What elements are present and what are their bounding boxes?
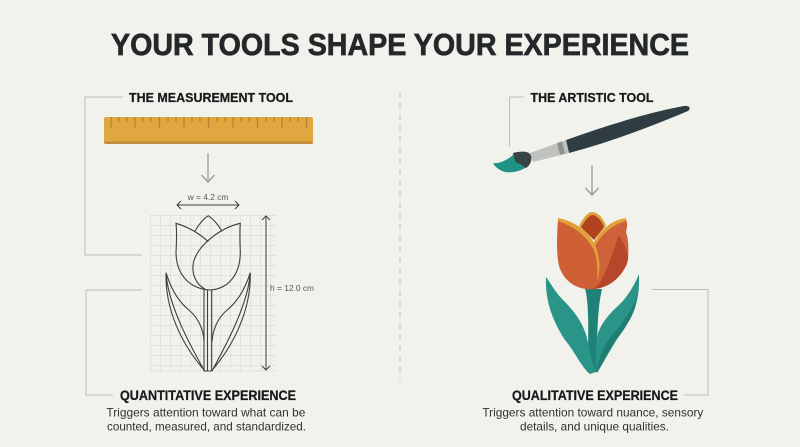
heading: the measurement tool: THE MEASUREMENT TOOL (129, 90, 293, 105)
arrow: ruler to drawing (202, 153, 214, 182)
connector: heading to brush (510, 97, 524, 147)
connector: tulip to caption (652, 290, 708, 395)
heading: the artistic tool: THE ARTISTIC TOOL (530, 90, 654, 105)
panel: artistic tool (482, 90, 708, 434)
grid (150, 215, 276, 371)
text: quantitative description: Triggers attention toward what can be (106, 406, 306, 420)
arrow: brush to tulip (586, 165, 598, 195)
text: qualitative description: Triggers attention toward nuance, sensory (482, 406, 703, 420)
arrow: width dimension (177, 201, 239, 209)
connector: drawing to caption (86, 290, 142, 395)
connector: heading to grid (85, 97, 142, 255)
heading: qualitative experience: QUALITATIVE EXPERIENCE (512, 388, 678, 403)
line drawing: tulip (166, 216, 250, 371)
title: YOUR TOOLS SHAPE YOUR EXPERIENCE (111, 27, 689, 62)
text: quantitative description: counted, measured, and standardized. (107, 420, 306, 434)
illustration: painted tulip (546, 212, 639, 374)
panel: measurement tool (85, 90, 314, 434)
icon: ruler (104, 117, 313, 144)
arrow: height dimension (262, 216, 270, 370)
text: qualitative description: details, and unique qualities. (520, 420, 669, 434)
icon: paintbrush (493, 106, 690, 172)
label: width: w = 4.2 cm (187, 192, 228, 202)
label: height: h = 12.0 cm (270, 283, 314, 293)
heading: quantitative experience: QUANTITATIVE EXPERIENCE (120, 388, 296, 403)
